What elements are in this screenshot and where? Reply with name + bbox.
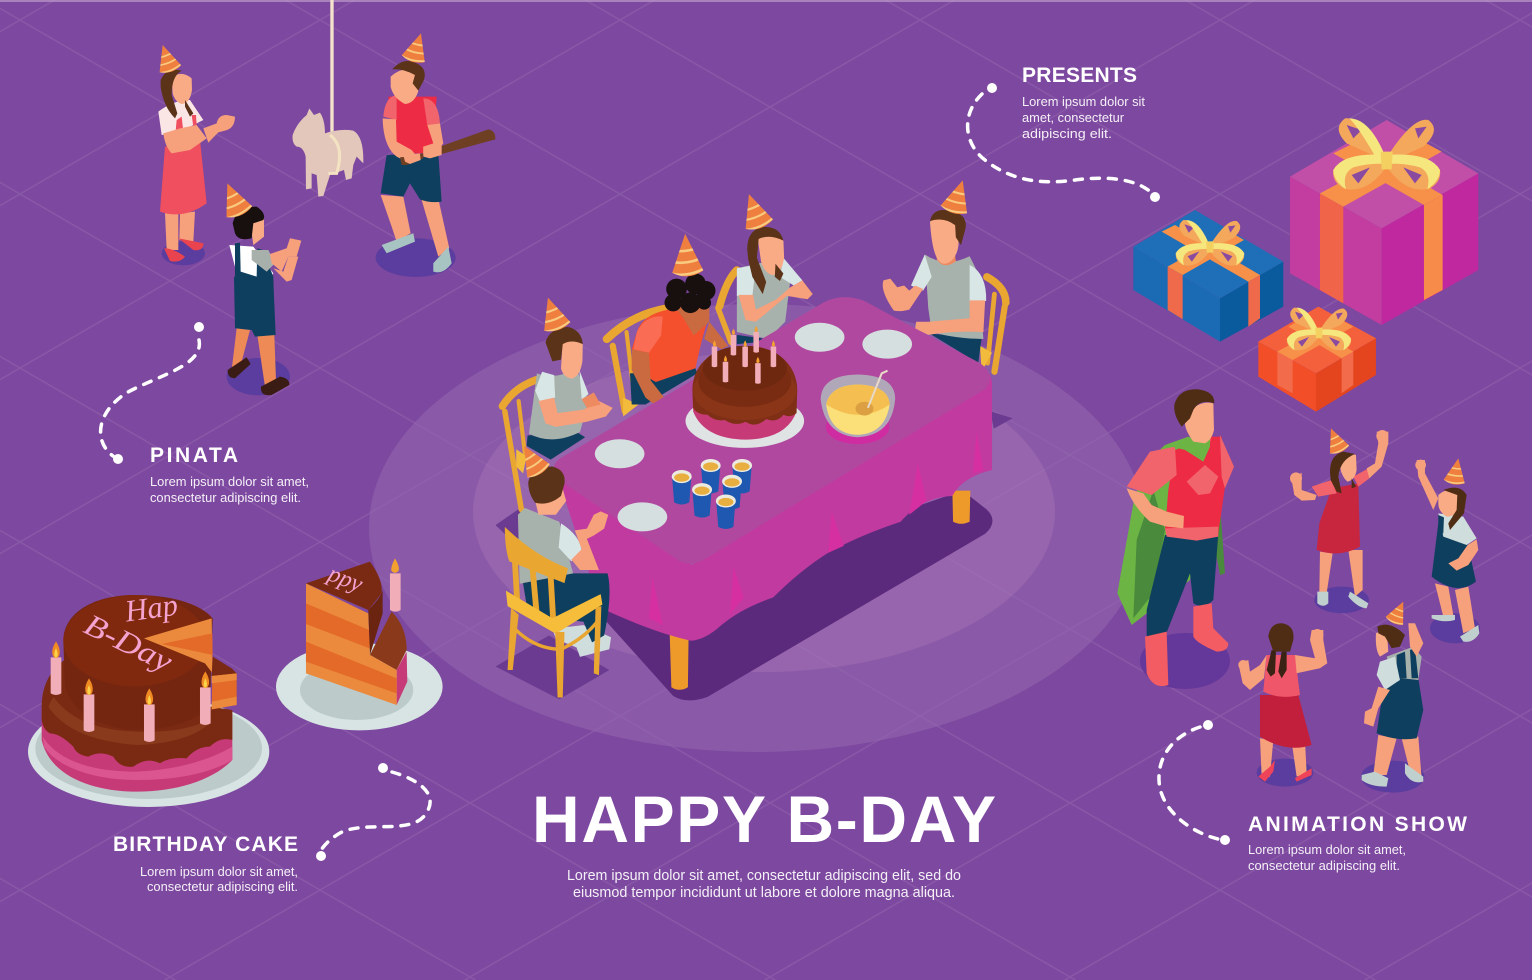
dancing girl in blue dress	[1415, 456, 1480, 643]
slice lettering: ppy	[323, 560, 367, 598]
text: presents	[1022, 64, 1145, 141]
cake slice on plate	[276, 558, 443, 730]
dashed connector: presents	[968, 83, 1160, 202]
large magenta gift	[1290, 118, 1478, 325]
text: birthday cake: BIRTHDAY CAKE	[113, 833, 298, 856]
text: animation show: Lorem ipsum dolor sit amet,	[1248, 842, 1406, 857]
dashed connector: animation show	[1159, 720, 1230, 845]
dancing girl in red dress	[1290, 423, 1388, 613]
person: girl with braids	[718, 188, 813, 344]
text: birthday cake: Lorem ipsum dolor sit amet,	[140, 864, 298, 879]
text: presents: adipiscing elit.	[1022, 126, 1112, 141]
large cake on plate: B-Day	[79, 607, 178, 679]
boy with bat	[376, 29, 495, 277]
text: pinata: Lorem ipsum dolor sit amet,	[150, 474, 309, 489]
girl in pink dress	[149, 41, 235, 265]
dashed connector: birthday cake	[316, 763, 430, 861]
person: child with curly hair	[607, 232, 728, 417]
person: boy left side	[502, 292, 613, 510]
party table scene	[496, 175, 1013, 700]
table legs	[670, 632, 689, 690]
title description: eiusmod tempor incididunt ut labore et dolore magna aliqua.	[573, 885, 955, 901]
text: animation show: consectetur adipiscing elit.	[1248, 858, 1400, 873]
text: pinata: consectetur adipiscing elit.	[150, 490, 301, 505]
pinata scene	[149, 0, 495, 395]
text: animation show: ANIMATION SHOW	[1248, 813, 1467, 836]
gift boxes	[1133, 118, 1478, 412]
boy in overalls clapping	[211, 176, 301, 395]
text: presents: Lorem ipsum dolor sit	[1022, 94, 1145, 109]
plates	[595, 323, 912, 531]
text: presents: PRESENTS	[1022, 64, 1137, 87]
boy in overalls from behind	[1361, 597, 1424, 793]
text: pinata	[150, 444, 309, 505]
person: boy in foreground chair	[505, 438, 611, 698]
text: birthday cake: consectetur adipiscing elit.	[147, 879, 298, 894]
animation show scene	[1117, 389, 1480, 793]
table shadow	[597, 491, 992, 700]
blue gift	[1133, 210, 1283, 342]
cake lettering: Hap	[122, 588, 180, 629]
title description	[567, 868, 961, 901]
title description: Lorem ipsum dolor sit amet, consectetur adipiscing elit, sed do	[567, 868, 961, 884]
superhero	[1117, 389, 1234, 689]
red gift	[1258, 307, 1376, 412]
girl with braids from behind	[1238, 623, 1327, 787]
person: man at far right	[883, 175, 1006, 372]
small birthday cake	[686, 326, 804, 448]
birthday cake and slice	[28, 558, 443, 807]
text: animation show	[1248, 813, 1467, 873]
table cloth	[554, 297, 992, 641]
punch bowl	[821, 371, 895, 444]
title: HAPPY B-DAY	[532, 782, 996, 856]
wooden chair	[505, 527, 602, 698]
text: birthday cake	[113, 833, 298, 894]
text: pinata: PINATA	[150, 444, 238, 467]
text: presents: amet, consectetur	[1022, 110, 1125, 125]
large cake on plate	[28, 588, 269, 807]
dashed connector: pinata	[101, 322, 204, 464]
cups	[672, 459, 752, 529]
pinata horse on rope	[292, 0, 363, 197]
